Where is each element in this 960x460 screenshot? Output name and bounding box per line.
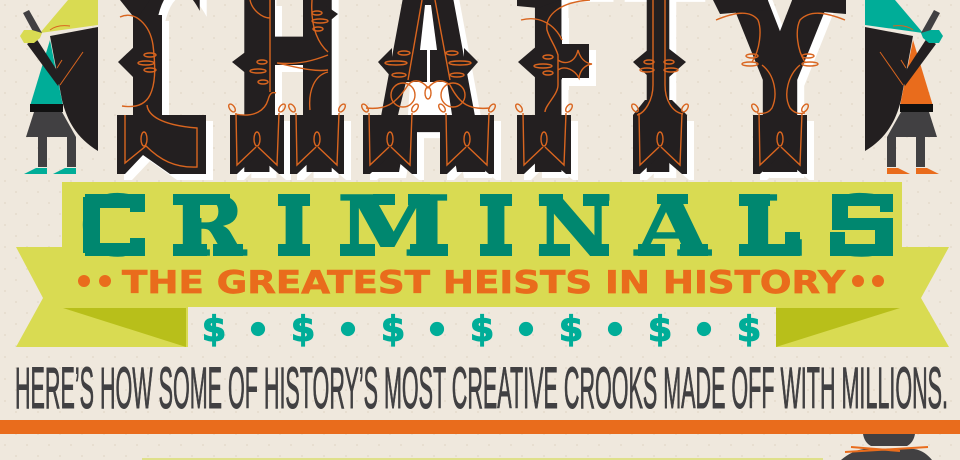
ribbon fold left	[63, 308, 186, 347]
illustration: right crook with flashlight	[865, 0, 943, 174]
row of dollar signs: $	[470, 310, 494, 350]
ribbon banner	[16, 182, 949, 347]
subtitle: the greatest heists in history: THE GREATEST HEISTS IN HISTORY	[122, 265, 846, 301]
heading: CRIMINALS: A	[634, 179, 712, 275]
heading: CRIMINALS: L	[736, 179, 803, 275]
heading: CRIMINALS: M	[337, 179, 451, 275]
heading: CRIMINALS: R	[171, 179, 247, 275]
heading slab serifs	[83, 194, 893, 256]
row of dollar signs: $	[648, 310, 672, 350]
heading: CRIMINALS: I	[477, 179, 515, 275]
row of dollar signs: $	[291, 310, 315, 350]
heading: CRIMINALS	[80, 179, 900, 275]
row of dollar signs: $	[202, 310, 226, 350]
row of dollar signs: $	[737, 310, 761, 350]
orange divider bar	[0, 420, 960, 434]
illustration: left crook with flashlight	[20, 0, 98, 174]
row of dollar signs: $	[559, 310, 583, 350]
title shadow	[124, 0, 834, 180]
heading: CRIMINALS: S	[827, 179, 896, 275]
heading: CRIMINALS: I	[275, 179, 313, 275]
title: CRAFTY	[117, 0, 846, 180]
heading: CRIMINALS: N	[536, 179, 612, 275]
heading: CRIMINALS: C	[80, 179, 148, 275]
row of dollar signs: $	[381, 310, 405, 350]
row of dollar signs	[202, 310, 761, 350]
icon: money bag	[841, 434, 932, 460]
ribbon fold right	[776, 308, 900, 347]
heading counters	[100, 205, 900, 244]
next section lime strip	[142, 458, 823, 460]
letter C	[117, 0, 206, 174]
